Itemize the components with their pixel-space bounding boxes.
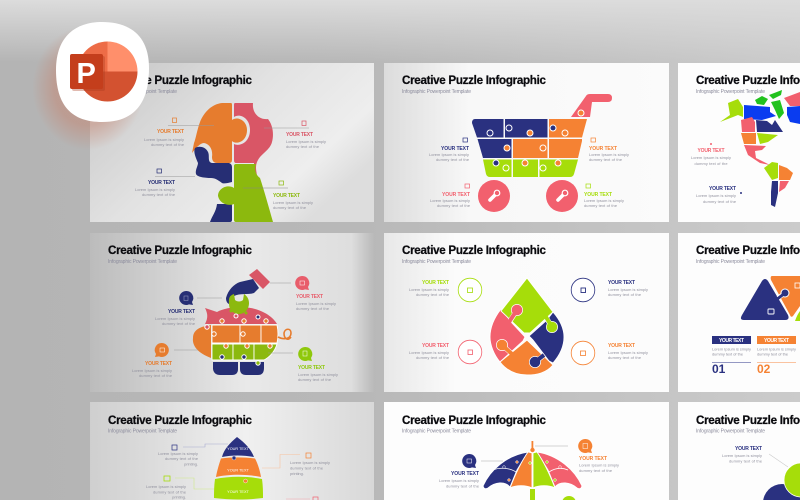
callout: pink label: dummy text of the (694, 161, 728, 166)
callout: navy label: YOUR TEXT (168, 309, 195, 315)
callout: orange label: dummy text of the (608, 355, 641, 360)
callout: orange label (535, 439, 619, 473)
panel: shopping cart slide (384, 63, 669, 222)
callout: orange label: Lorem Ipsum is simply (132, 368, 172, 373)
subtitle: Infographic Powerpoint Template (696, 89, 765, 95)
subtitle: Infographic Powerpoint Template (402, 259, 471, 265)
callout: orange label: YOUR TEXT (579, 456, 607, 462)
title: Creative Puzzle Infographic (402, 244, 547, 257)
callout: green note: Lorem Ipsum is simply (146, 484, 186, 489)
callout: green label: Lorem Ipsum is simply (584, 198, 624, 203)
callout: pink label: dummy text of the (416, 355, 449, 360)
callout: navy label: dummy text of the (162, 321, 195, 326)
step 01: 01 (712, 362, 726, 376)
callout: navy label: dummy text of the (729, 458, 762, 464)
callout: navy note (158, 444, 228, 466)
callout: green label: dummy text of the (416, 292, 449, 297)
callout: pink label (691, 143, 731, 166)
callout: navy label: YOUR TEXT (608, 280, 635, 286)
title: Creative Puzzle Infographic (108, 74, 253, 87)
callout: navy note: printing. (184, 462, 198, 466)
panel: water drop slide (384, 233, 669, 392)
panel: circular puzzle slide (678, 402, 800, 500)
callout: navy label (722, 446, 788, 467)
callout: pink label: YOUR TEXT (296, 294, 323, 300)
chart: rocket puzzle (214, 437, 263, 500)
callout: orange note: dummy text of the (290, 466, 323, 470)
callout: navy label: dummy text of the (142, 192, 175, 197)
callout: orange label: dummy text of the (589, 157, 622, 162)
subtitle: Infographic Powerpoint Template (108, 259, 177, 265)
panel: rocket puzzle slide (90, 402, 374, 500)
callout: navy label: YOUR TEXT (441, 146, 469, 152)
title: Creative Puzzle Infographic (108, 244, 253, 257)
callout: pink label: Lorem Ipsum is simply (296, 301, 336, 306)
callout: navy label: dummy text of the (446, 484, 479, 488)
callout: orange label: dummy text of the (579, 468, 612, 473)
callout: pink label (430, 184, 470, 208)
panel: triangle puzzle slide (678, 233, 800, 392)
panel: world map slide (678, 63, 800, 222)
callout: pink connector (286, 497, 318, 500)
callout: navy label: Lorem Ipsum is simply (429, 152, 469, 157)
subtitle: Infographic Powerpoint Template (108, 89, 177, 95)
callout: orange label: Lorem Ipsum is simply (589, 152, 629, 157)
callout: green label (409, 278, 482, 302)
callout: pink label: dummy text of the (286, 144, 319, 149)
subtitle: Infographic Powerpoint Template (402, 428, 471, 434)
callout: green label: dummy text of the (298, 377, 331, 382)
callout: navy label (429, 138, 469, 162)
callout: navy label: YOUR TEXT (148, 180, 175, 186)
chart: head puzzle (192, 103, 273, 222)
callout: navy label (439, 454, 503, 488)
chart: triangle puzzle (741, 276, 800, 321)
chart: shopping cart puzzle (472, 94, 612, 212)
callout: pink label (409, 340, 482, 364)
icon: PowerPoint app badge (32, 22, 149, 150)
callout: pink label: YOUR TEXT (286, 132, 313, 138)
callout: navy note: dummy text of the (165, 456, 198, 461)
chart: puzzle map of the Americas (720, 90, 800, 207)
callout: orange label: YOUR TEXT (608, 343, 635, 349)
callout: green label: Lorem Ipsum is simply (409, 287, 449, 292)
step 01 (712, 336, 751, 376)
step 02: 02 (757, 362, 771, 376)
callout: orange label: dummy text of the (151, 142, 184, 147)
icon: green bubble (562, 496, 576, 500)
callout: orange label: YOUR TEXT (157, 129, 184, 135)
step 01: YOUR TEXT (719, 338, 744, 344)
callout: pink label: YOUR TEXT (442, 192, 470, 198)
callout: pink label: YOUR TEXT (698, 148, 724, 154)
callout: navy label: YOUR TEXT (451, 471, 479, 477)
callout: navy label (571, 278, 648, 302)
callout: green label: YOUR TEXT (273, 193, 300, 199)
panel: head puzzle slide (90, 63, 374, 222)
step 02: dummy text of the (757, 352, 788, 356)
callout: orange label (144, 118, 214, 147)
callout: green label: dummy text of the (584, 203, 617, 208)
subtitle: Infographic Powerpoint Template (108, 428, 177, 434)
callout: navy label: Lorem Ipsum is simply (696, 193, 736, 198)
callout: pink label: Lorem Ipsum is simply (430, 198, 470, 203)
callout: orange label (132, 343, 198, 378)
callout: navy label: dummy text of the (608, 292, 641, 297)
icon: PowerPoint app badge: P (76, 58, 96, 90)
callout: pink label: Lorem Ipsum is simply (691, 155, 731, 160)
callout: green label: Lorem Ipsum is simply (273, 200, 313, 205)
title: Creative Puzzle Infographic (402, 414, 547, 427)
subtitle: Infographic Powerpoint Template (696, 259, 765, 265)
chart: rocket puzzle: YOUR TEXT (227, 447, 250, 451)
callout: navy label: YOUR TEXT (735, 446, 762, 452)
callout: orange label: Lorem Ipsum is simply (579, 462, 619, 468)
callout: green label (584, 184, 624, 208)
callout: green note (146, 476, 214, 500)
title: Creative Puzzle Infographic (108, 414, 253, 427)
callout: navy note: Lorem Ipsum is simply (158, 451, 198, 456)
callout: orange label: Lorem Ipsum is simply (608, 350, 648, 355)
step 01: dummy text of the (712, 352, 743, 356)
callout: navy label: Lorem Ipsum is simply (135, 187, 175, 192)
panel: piggy bank slide (90, 233, 374, 392)
callout: navy label: Lorem Ipsum is simply (155, 316, 195, 321)
callout: navy label (155, 291, 222, 326)
callout: green label: dummy text of the (273, 205, 306, 210)
callout: green label: Lorem Ipsum is simply (298, 372, 338, 377)
callout: orange label: Lorem Ipsum is simply (144, 137, 184, 142)
callout: green label (243, 181, 313, 210)
callout: green label: YOUR TEXT (298, 365, 325, 371)
chart: rocket puzzle: YOUR TEXT (227, 490, 250, 494)
chart: rocket puzzle: YOUR TEXT (227, 468, 250, 472)
callout: orange label: dummy text of the (139, 373, 172, 378)
chart: piggy bank puzzle (193, 269, 291, 375)
step 02 (757, 336, 796, 376)
callout: orange label (589, 138, 629, 162)
callout: navy label: dummy text of the (703, 199, 736, 204)
title: Creative Puzzle Infographic (402, 74, 547, 87)
callout: orange note: printing. (290, 471, 304, 476)
callout: orange note: Lorem Ipsum is simply (290, 460, 330, 465)
callout: navy label (135, 169, 195, 197)
callout: navy label: dummy text of the (436, 157, 469, 162)
callout: pink label: dummy text of the (437, 203, 470, 208)
callout: green label: YOUR TEXT (422, 280, 449, 286)
callout: pink label: YOUR TEXT (422, 343, 449, 349)
chart: umbrella puzzle (483, 441, 582, 500)
step 02: Lorem Ipsum is simply (757, 346, 796, 352)
callout: green label: YOUR TEXT (584, 192, 612, 198)
callout: orange label: YOUR TEXT (145, 361, 172, 367)
callout: pink label: Lorem Ipsum is simply (409, 350, 449, 355)
callout: green note: dummy text of the (153, 490, 186, 494)
callout: navy label: Lorem Ipsum is simply (439, 478, 479, 483)
callout: navy label (696, 186, 742, 204)
puzzle tabs (496, 304, 558, 368)
step 02: YOUR TEXT (764, 338, 789, 344)
panel: umbrella puzzle slide (384, 402, 669, 500)
chart: water drop puzzle (490, 278, 564, 375)
subtitle: Infographic Powerpoint Template (402, 89, 471, 95)
callout: orange label (571, 341, 648, 365)
callout: navy label: Lorem Ipsum is simply (608, 287, 648, 292)
callout: pink label (270, 276, 336, 311)
callout: orange label: YOUR TEXT (589, 146, 617, 152)
callout: navy label: Lorem Ipsum is simply (722, 453, 762, 458)
callout: pink label: Lorem Ipsum is simply (286, 139, 326, 144)
callout: orange note (262, 453, 330, 476)
step 01: Lorem Ipsum is simply (712, 346, 751, 352)
callout: pink label (264, 121, 326, 149)
chart: circular puzzle (763, 463, 800, 500)
callout: green note: printing. (172, 494, 186, 500)
subtitle: Infographic Powerpoint Template (696, 428, 765, 434)
callout: navy label: YOUR TEXT (709, 186, 736, 192)
callout: green label (268, 347, 338, 382)
callout: pink label: dummy text of the (296, 306, 329, 311)
